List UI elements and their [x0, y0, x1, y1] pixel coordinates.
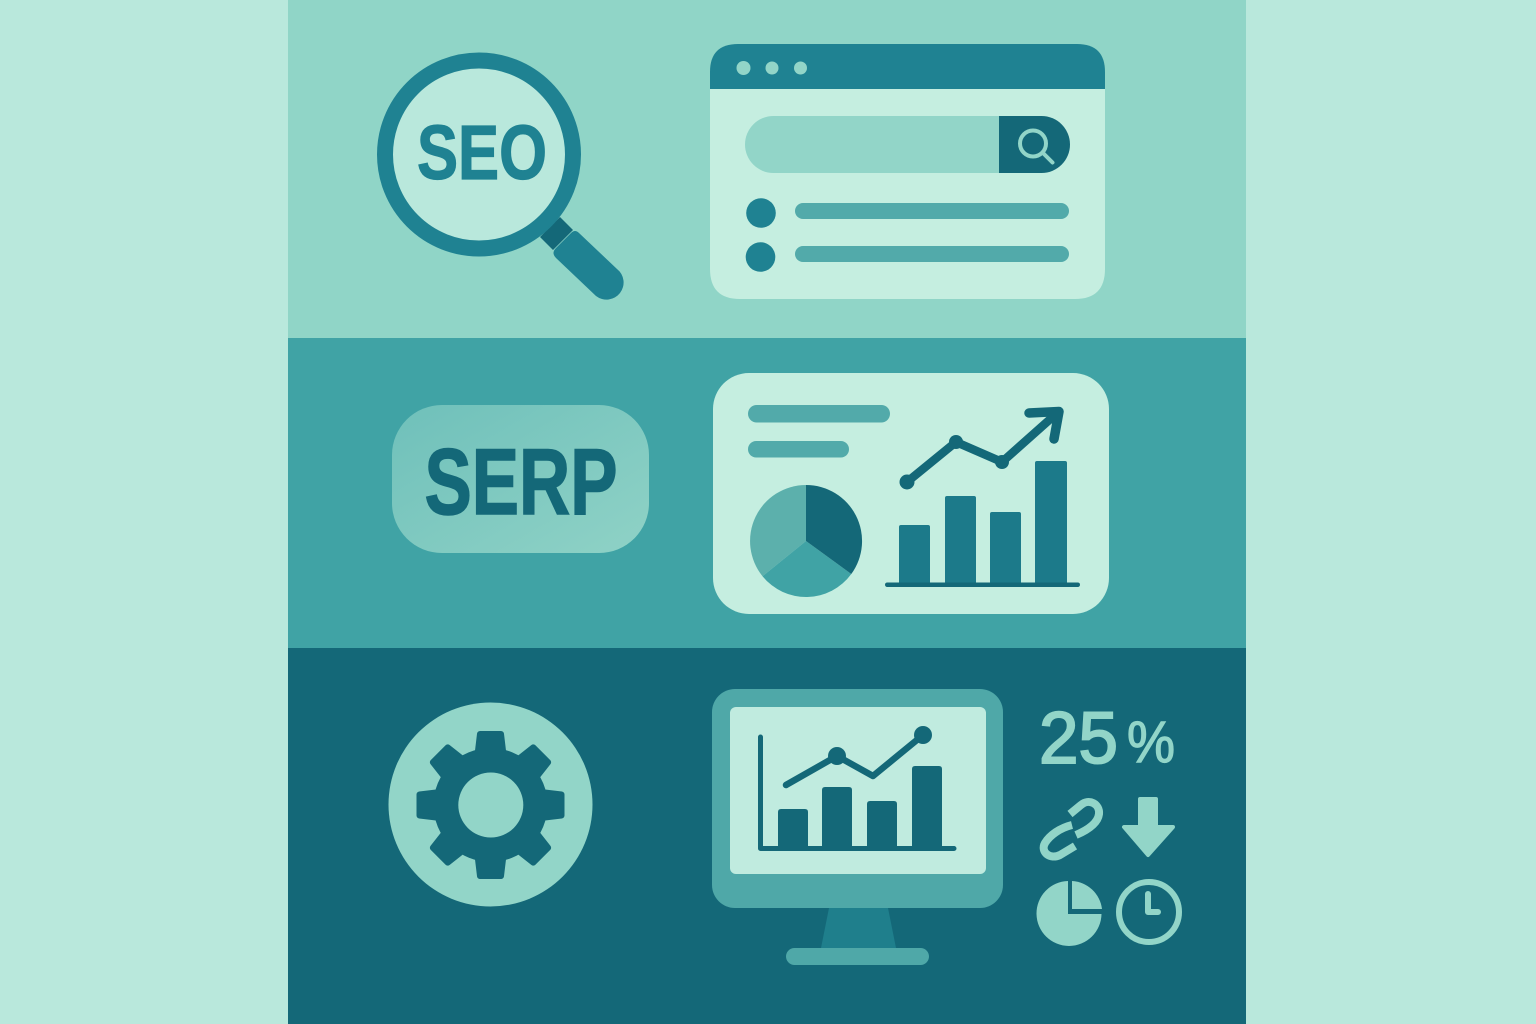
- icon: pie chart: [1037, 881, 1102, 946]
- search result row 2: [746, 242, 1069, 272]
- browser title bar: [710, 44, 1105, 89]
- stat: 25 percent: 25: [1039, 698, 1118, 779]
- trend line with arrow: [900, 412, 1059, 490]
- monitor: [712, 689, 1003, 965]
- search bar: [745, 116, 1070, 173]
- panel: SEO band: [288, 0, 1246, 338]
- SERP badge: [392, 405, 649, 553]
- icon: broken link: [1044, 802, 1099, 857]
- bar chart: [885, 461, 1080, 587]
- label: SERP: SERP: [424, 429, 618, 534]
- icon: down arrow: [1124, 799, 1173, 855]
- icon: search: [1020, 130, 1052, 162]
- icon: clock: [1119, 882, 1179, 942]
- pie chart: [750, 485, 862, 597]
- panel: SERP band: [288, 338, 1246, 648]
- search result row 1: [746, 198, 1069, 228]
- browser window: [710, 44, 1105, 299]
- icon: gear badge: [388, 702, 592, 906]
- stat: 25 percent: %: [1127, 710, 1175, 775]
- panel: technical analytics band: [288, 648, 1246, 1024]
- gear: [420, 734, 562, 876]
- label: SEO: SEO: [417, 110, 547, 196]
- analytics dashboard card: [713, 373, 1109, 614]
- text placeholder lines: [748, 405, 890, 458]
- icon: SEO magnifying glass: [385, 60, 624, 300]
- stat: 25 percent: [1039, 698, 1175, 779]
- monitor chart: [760, 726, 954, 848]
- monitor stand: [786, 908, 929, 965]
